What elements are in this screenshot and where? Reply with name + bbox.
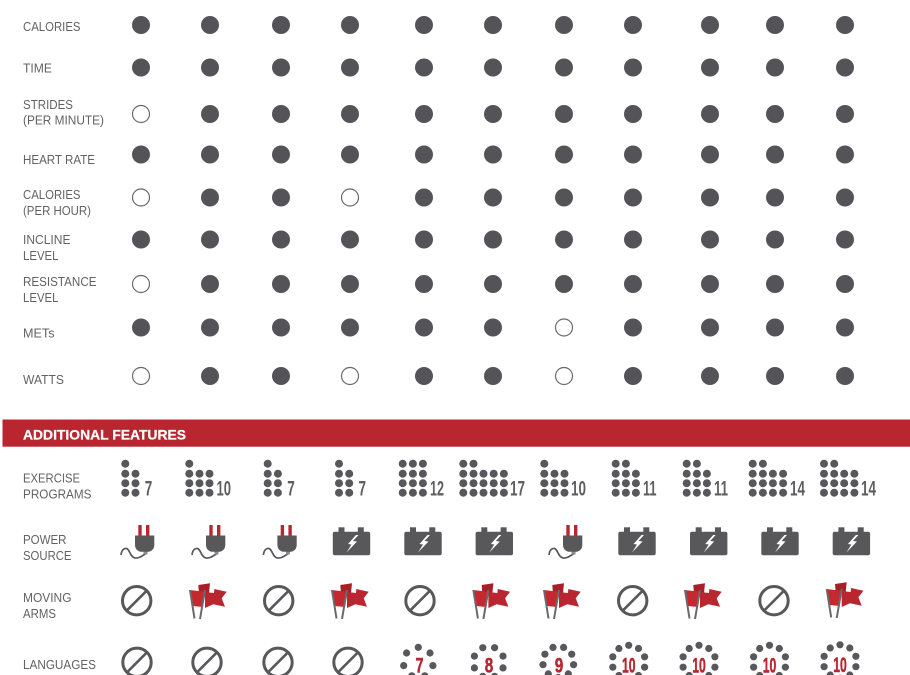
- row: calories: CALORIES: [23, 20, 80, 34]
- panel: exercise programs row: 14: [790, 476, 805, 500]
- row: strides per minute: STRIDES: [23, 98, 73, 112]
- row: resistance level: RESISTANCE: [23, 275, 96, 289]
- panel: languages row: LANGUAGES: [23, 658, 96, 672]
- row: calories per hour: (PER HOUR): [23, 204, 91, 218]
- panel: exercise programs row: 10: [216, 476, 231, 500]
- row: heart rate: HEART RATE: [23, 153, 95, 167]
- panel: moving arms row: ARMS: [23, 607, 56, 621]
- row: resistance level: LEVEL: [23, 291, 59, 305]
- row: strides per minute: [23, 98, 854, 128]
- row: incline level: LEVEL: [23, 249, 59, 263]
- panel: exercise programs row: PROGRAMS: [23, 487, 92, 501]
- panel: exercise programs row: 7: [145, 476, 152, 500]
- panel: power source row: [23, 525, 870, 563]
- heading: additional features band: [2, 420, 910, 447]
- row: calories: [23, 16, 854, 34]
- row: incline level: INCLINE: [23, 233, 70, 247]
- row: time: [23, 58, 854, 76]
- row: watts: [23, 367, 854, 387]
- row: time: TIME: [23, 62, 52, 76]
- heading: additional features band: ADDITIONAL FEATURES: [23, 426, 186, 442]
- panel: exercise programs row: 11: [643, 476, 657, 500]
- row: METs: [23, 318, 854, 340]
- row: heart rate: [23, 146, 854, 167]
- panel: exercise programs row: 7: [358, 476, 366, 500]
- row: calories per hour: [23, 188, 854, 218]
- panel: moving arms row: MOVING: [23, 591, 72, 605]
- panel: exercise programs row: 10: [571, 476, 586, 500]
- panel: languages row: [23, 641, 860, 675]
- row: resistance level: [23, 275, 854, 305]
- panel: moving arms row: [23, 582, 863, 621]
- row: strides per minute: (PER MINUTE): [23, 114, 104, 128]
- panel: exercise programs row: 11: [714, 476, 728, 500]
- panel: exercise programs row: 12: [430, 476, 444, 500]
- row: watts: WATTS: [23, 373, 64, 387]
- row: calories per hour: CALORIES: [23, 188, 80, 202]
- panel: exercise programs row: [23, 460, 876, 501]
- panel: power source row: SOURCE: [23, 549, 72, 563]
- panel: exercise programs row: 14: [861, 476, 876, 500]
- panel: tracked metrics table: [23, 16, 854, 387]
- panel: exercise programs row: 17: [510, 476, 525, 500]
- row: incline level: [23, 230, 854, 263]
- panel: exercise programs row: 7: [287, 476, 295, 500]
- panel: exercise programs row: EXERCISE: [23, 472, 80, 486]
- row: METs: METs: [23, 326, 54, 340]
- panel: power source row: POWER: [23, 533, 66, 547]
